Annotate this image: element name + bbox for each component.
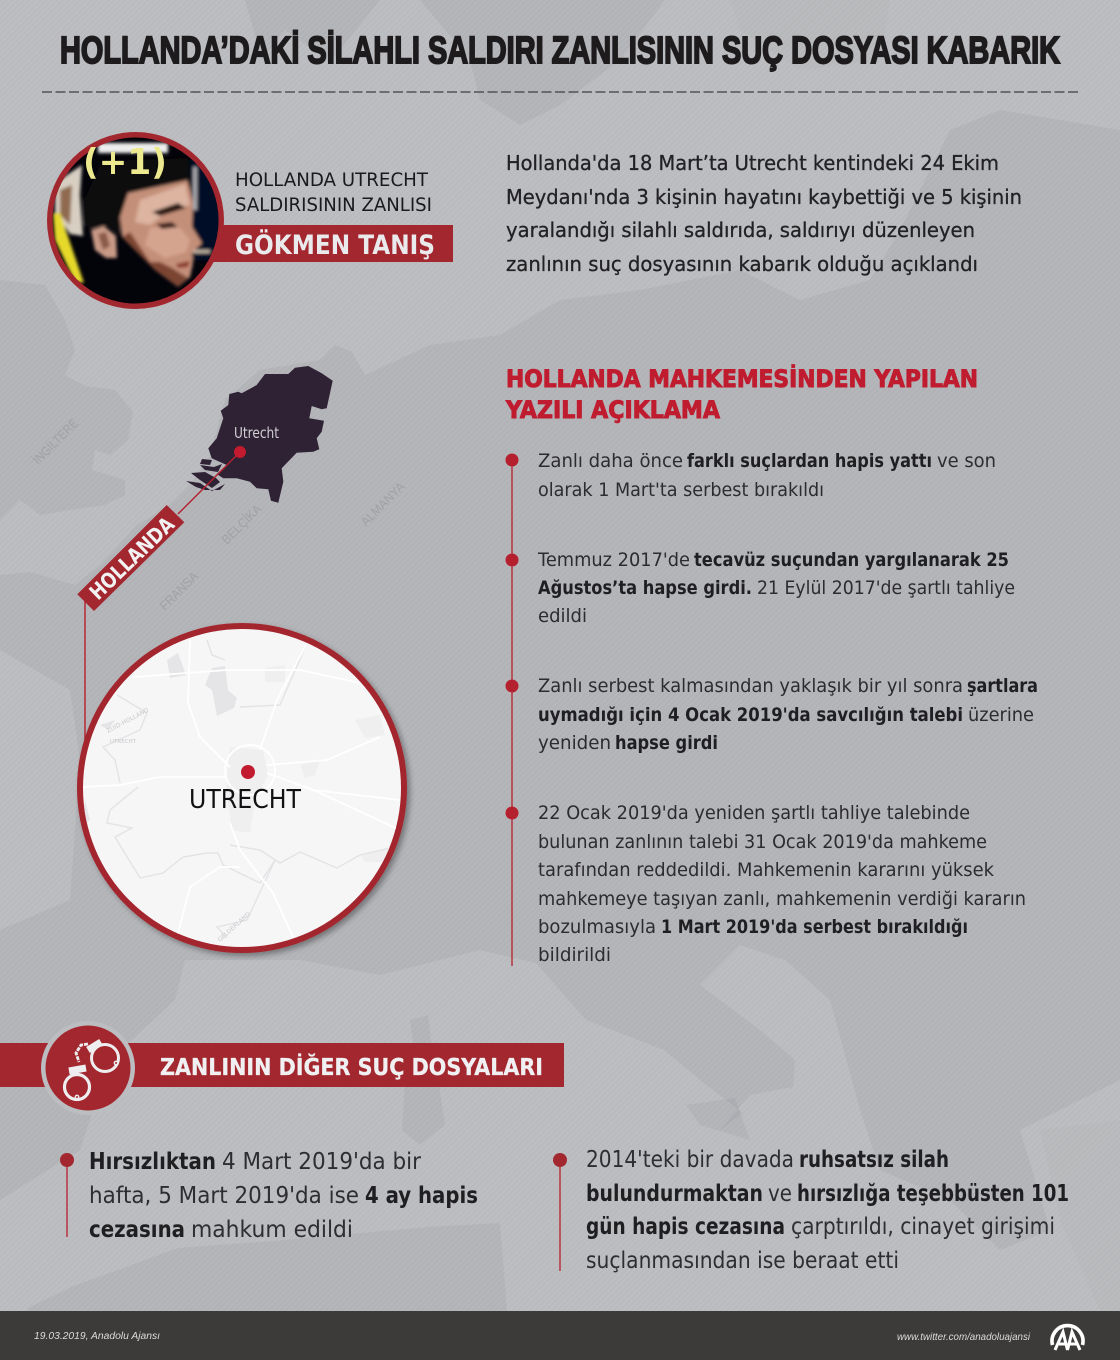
country labels: FRANSA [157,568,201,613]
bullet 4 [506,802,1026,966]
twitter address: www.twitter.com/anadoluajansi [897,1331,1031,1343]
country labels: BELÇİKA [219,501,265,547]
intro text block: yaralandığı silahlı saldırıda, saldırıyı düzenleyen [506,218,975,242]
icon: suspect portrait [47,132,225,310]
bullet 1: Zanlı daha önce [538,450,683,472]
bullet 4: 22 Ocak 2019'da yeniden şartlı tahliye talebinde [538,802,970,824]
bullet 1: ve son [937,450,996,472]
bullet 3: uymadığı için 4 Ocak 2019'da savcılığın talebi [538,704,963,726]
timeline line [511,460,513,966]
bullet 1: farklı suçlardan hapis yattı [687,450,932,472]
Utrecht pin and label: Utrecht [234,424,279,442]
bottom left item: hafta, 5 Mart 2019'da ise [89,1183,359,1209]
city pin and name: UTRECHT [189,785,301,815]
map: Netherlands locator [30,366,408,742]
map: Utrecht city circle: UTRECHT [110,739,137,745]
icon: handcuffs [64,1042,118,1100]
map: Utrecht city circle [77,623,407,953]
icon: AA logo [1052,1326,1083,1350]
date credit: 19.03.2019, Anadolu Ajansı [34,1330,160,1342]
bullet 4: bulunan zanlının talebi 31 Ocak 2019'da mahkeme [538,831,987,853]
bottom left item [60,1149,478,1243]
bullet 4: tarafından reddedildi. Mahkemenin kararını yüksek [538,859,994,881]
bottom left item: 4 ay hapis [365,1183,478,1209]
bottom left item: mahkum edildi [191,1217,353,1243]
panel: suspect profile [47,132,453,310]
bottom right item: 2014'teki bir davada [586,1147,794,1173]
bullet 3: hapse girdi [615,732,718,754]
bullet 2: Ağustos’ta hapse girdi. [538,577,752,599]
country labels [30,415,408,613]
icon: suspect portrait: (+1) [83,142,167,183]
bullet 1 [506,450,996,501]
map: Utrecht city circle: GELDERLAND [217,911,252,943]
section header: other criminal files [0,1021,564,1115]
suspect caption [235,169,432,216]
footer bar [0,1311,1120,1360]
heading: court statement: YAZILI AÇIKLAMA [505,396,720,424]
bullet 4: 1 Mart 2019'da serbest bırakıldığı [661,916,968,938]
bullet 2: tecavüz suçundan yargılanarak 25 [694,549,1009,571]
country labels: İNGİLTERE [30,415,81,467]
bullet 3: üzerine [968,704,1034,726]
bullet 2: 21 Eylül 2017'de şartlı tahliye [757,577,1015,599]
suspect caption: SALDIRISININ ZANLISI [235,194,432,216]
bottom right item: ruhsatsız silah [799,1147,949,1173]
bottom right item: suçlanmasından ise beraat etti [586,1248,899,1274]
bottom left item: 4 Mart 2019'da bir [222,1149,421,1175]
bullet 2 [506,549,1015,627]
section title: ZANLININ DİĞER SUÇ DOSYALARI [160,1053,543,1081]
intro text block: Hollanda'da 18 Mart’ta Utrecht kentindeki 24 Ekim [506,151,999,175]
intro text block: zanlının suç dosyasının kabarık olduğu açıklandı [506,252,978,276]
bullet 3: yeniden [538,732,611,754]
map: Utrecht city circle: ZUID-HOLLAND [106,707,150,735]
heading: court statement [505,364,978,424]
bullet 3: Zanlı serbest kalmasından yaklaşık bir yıl sonra [538,675,963,697]
bottom left item: Hırsızlıktan [89,1149,216,1175]
bullet 4: bozulmasıyla [538,916,656,938]
bottom right item: çarptırıldı, cinayet girişimi [791,1214,1055,1240]
bullet 2: Temmuz 2017'de [537,549,690,571]
bottom right item: bulundurmaktan [586,1181,763,1207]
label: HOLLANDA ribbon: HOLLANDA [85,512,180,605]
country labels: ALMANYA [358,479,408,529]
intro text block: Meydanı'nda 3 kişinin hayatını kaybettiği ve 5 kişinin [506,185,1022,209]
bullet 4: bildirildi [538,944,611,966]
bullet 3 [506,675,1038,754]
bottom left item: cezasına [89,1217,185,1243]
bottom right item: gün hapis cezasına [586,1214,785,1240]
bullet 3: şartlara [967,675,1038,697]
bottom right item [553,1147,1069,1274]
bullet 1: olarak 1 Mart'ta serbest bırakıldı [538,479,824,501]
suspect caption: HOLLANDA UTRECHT [235,169,428,191]
name banner: GÖKMEN TANIŞ [235,228,435,261]
bullet 2: edildi [538,605,587,627]
bullet 4: mahkemeye taşıyan zanlı, mahkemenin verdiği kararın [538,888,1026,910]
Netherlands shape [186,366,333,503]
Utrecht pin and label [178,424,279,514]
city pin and name [189,765,301,815]
heading: court statement: HOLLANDA MAHKEMESİNDEN YAPILAN [506,364,978,393]
intro text block [506,151,1022,276]
bottom right item: ve [768,1181,792,1207]
